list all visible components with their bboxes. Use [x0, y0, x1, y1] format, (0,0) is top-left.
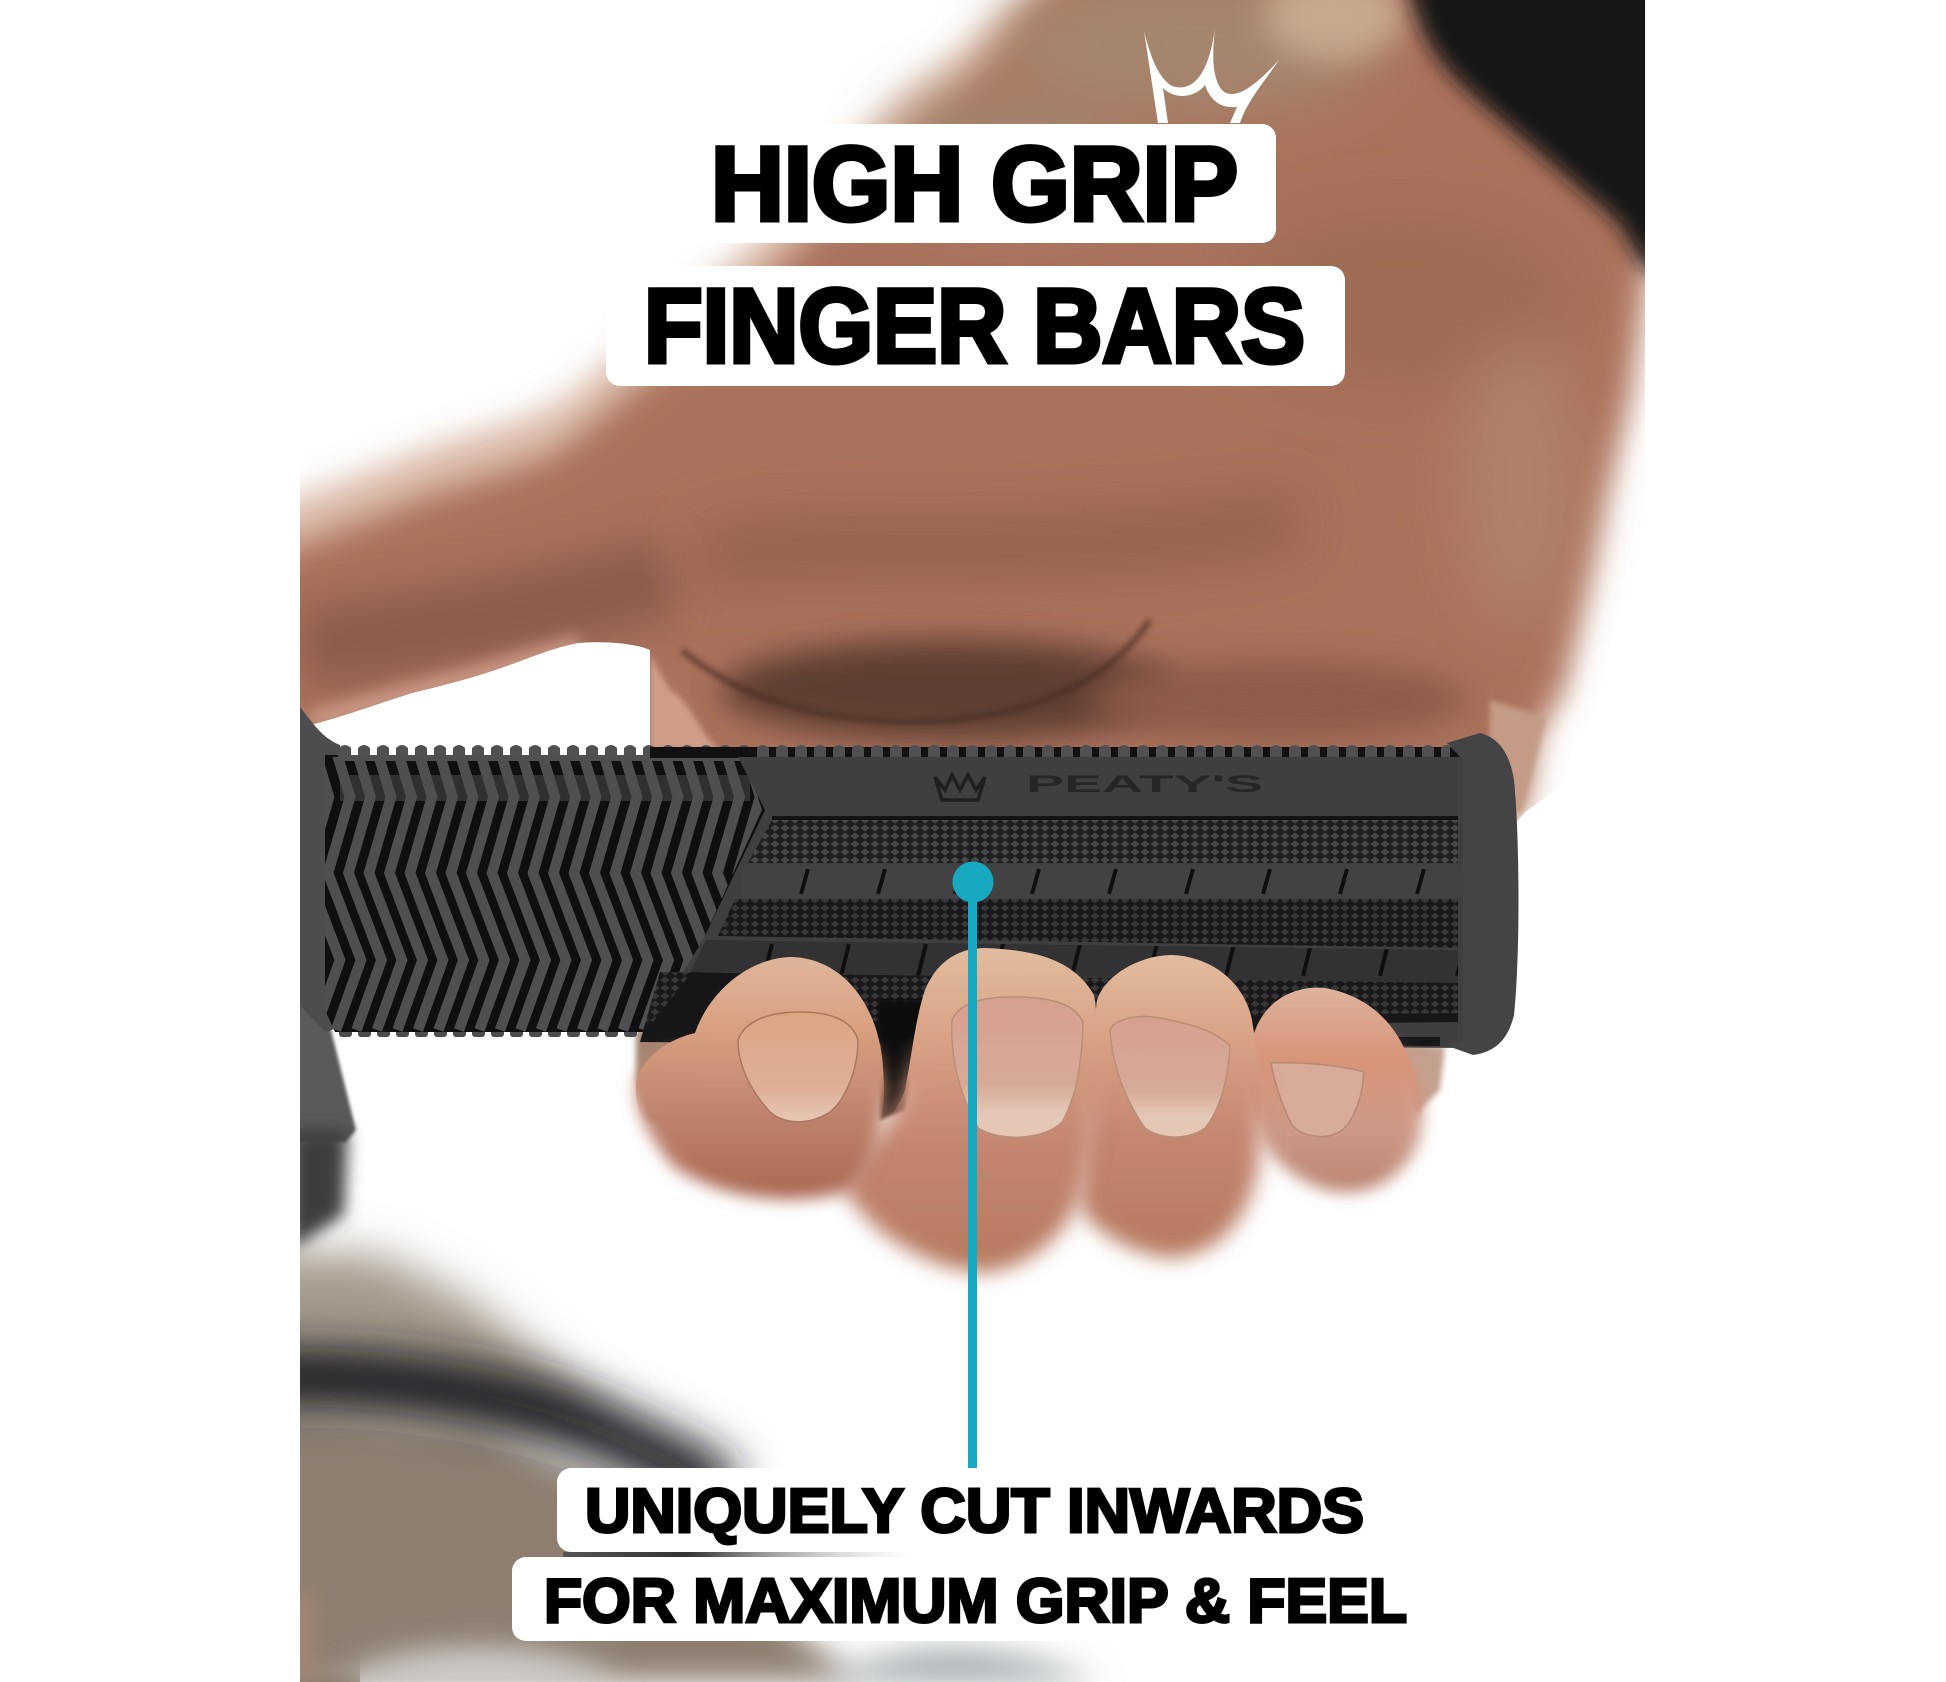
infographic: high grip finger bars [300, 0, 1645, 1682]
grip collar [300, 707, 342, 1032]
nail 4 [1271, 1063, 1364, 1137]
finger 2 [845, 948, 1098, 1273]
finger 3 [1080, 955, 1261, 1258]
logo: crown on grip [935, 775, 985, 800]
hand right side behind flange [1490, 700, 1546, 812]
nail 1 [738, 1012, 858, 1122]
stem below the grip [295, 1000, 356, 1142]
background: blurred bike frame lower left [250, 1000, 1100, 1682]
grip smooth right section [640, 743, 1463, 1048]
title box: high grip: HIGH GRIP [711, 126, 1238, 243]
grip: Peaty's rubber bar grip [300, 707, 1518, 1055]
dark shadow between the fingers [878, 1000, 925, 1120]
callout box: for maximum grip and feel: FOR MAXIMUM GRIP & FEEL [544, 1567, 1407, 1636]
hand: blurred palm and index finger [300, 0, 1645, 822]
finger 1 [636, 957, 884, 1199]
background: dark top right corner [1396, 0, 1645, 285]
icon: white crown logo [1144, 28, 1279, 123]
finger 4 [1249, 988, 1422, 1193]
grip end flange [1445, 733, 1518, 1055]
nail 2 [952, 997, 1083, 1137]
logo text: PEATY'S [1026, 771, 1263, 798]
callout marker: teal dot and leader line [952, 862, 994, 1468]
nail 3 [1110, 1016, 1230, 1137]
photo: hand gripping the bike grip [300, 0, 1645, 1682]
callout box: uniquely cut inwards: UNIQUELY CUT INWARDS [585, 1477, 1364, 1546]
dark sliver between the bottom boxes [563, 1552, 913, 1557]
grip chevron section [307, 743, 772, 1038]
palm below the grip [636, 1030, 1445, 1140]
title box: finger bars: FINGER BARS [644, 268, 1305, 385]
